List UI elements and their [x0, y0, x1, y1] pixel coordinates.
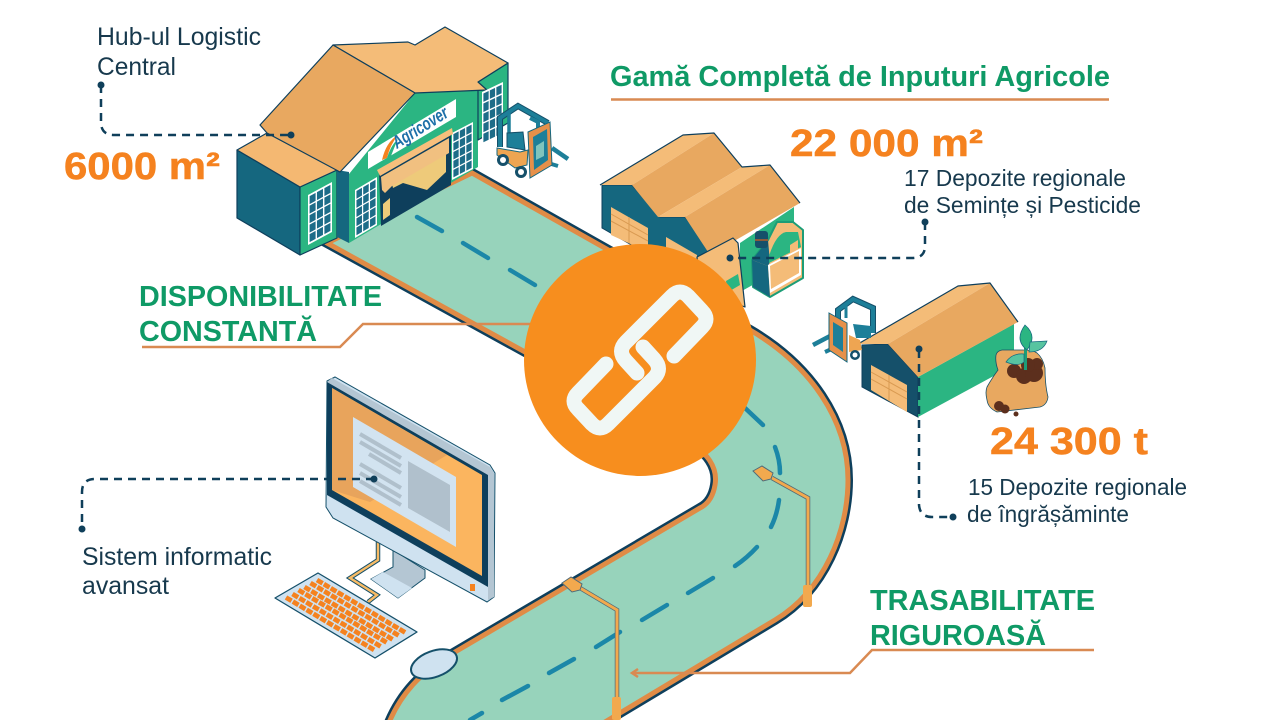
sack with seedling	[986, 325, 1048, 416]
callout arrow: trasabilitate	[632, 650, 1094, 677]
window: far right	[482, 82, 503, 145]
metric: 24 300 t: 24 300 t	[990, 421, 1148, 463]
warehouse: fertilizers	[858, 283, 1018, 417]
heading: disponibilitate: CONSTANTĂ	[139, 316, 317, 348]
forklift: fertilizers	[813, 299, 873, 362]
metric: 22 000 m2: 22 000 m²	[790, 123, 983, 165]
loading door	[377, 128, 453, 226]
chain link badge	[524, 244, 756, 476]
cable	[350, 542, 378, 602]
heading: trasabilitate: TRASABILITATE	[870, 585, 1095, 617]
callout line: disponibilitate	[142, 324, 535, 347]
text: computer: avansat	[82, 572, 169, 600]
computer mouse	[407, 644, 461, 684]
window: left block	[308, 182, 332, 245]
text: seed depots: de Semințe și Pesticide	[904, 192, 1141, 218]
text: fertilizer depots: de îngrășăminte	[967, 501, 1129, 527]
bag beside the warehouse	[697, 238, 745, 307]
warehouse group: seeds and pesticides	[600, 133, 803, 307]
text: hub: Hub-ul Logistic	[97, 23, 261, 51]
leader: fertilizer depots	[916, 346, 956, 520]
pesticide canister	[752, 222, 803, 297]
text: fertilizer depots: 15 Depozite regionale	[968, 474, 1187, 500]
central warehouse	[237, 27, 508, 255]
road centre dashes	[417, 217, 780, 720]
company banner	[368, 99, 456, 169]
computer monitor	[326, 377, 495, 602]
heading: trasabilitate: RIGUROASĂ	[870, 620, 1046, 652]
heading: inputs: Gamă Completă de Inputuri Agricole	[610, 61, 1110, 93]
metric: 6000 m2: 6000 m²	[64, 146, 220, 188]
leader: hub	[98, 82, 294, 138]
street lamp: lower	[562, 577, 621, 720]
window: front left	[355, 177, 377, 238]
company banner: Agricover	[388, 102, 452, 153]
text: hub: Central	[97, 53, 176, 81]
street lamp: upper	[753, 466, 812, 607]
keyboard	[275, 573, 417, 658]
monitor stand	[371, 550, 425, 598]
text: computer: Sistem informatic	[82, 543, 272, 571]
leader: computer	[78, 476, 378, 532]
heading: disponibilitate: DISPONIBILITATE	[139, 281, 382, 313]
road	[327, 173, 848, 720]
text: seed depots: 17 Depozite regionale	[904, 165, 1126, 191]
leader: seed depots	[726, 218, 928, 262]
forklift: central hub	[497, 106, 568, 178]
window: front right	[452, 122, 473, 180]
